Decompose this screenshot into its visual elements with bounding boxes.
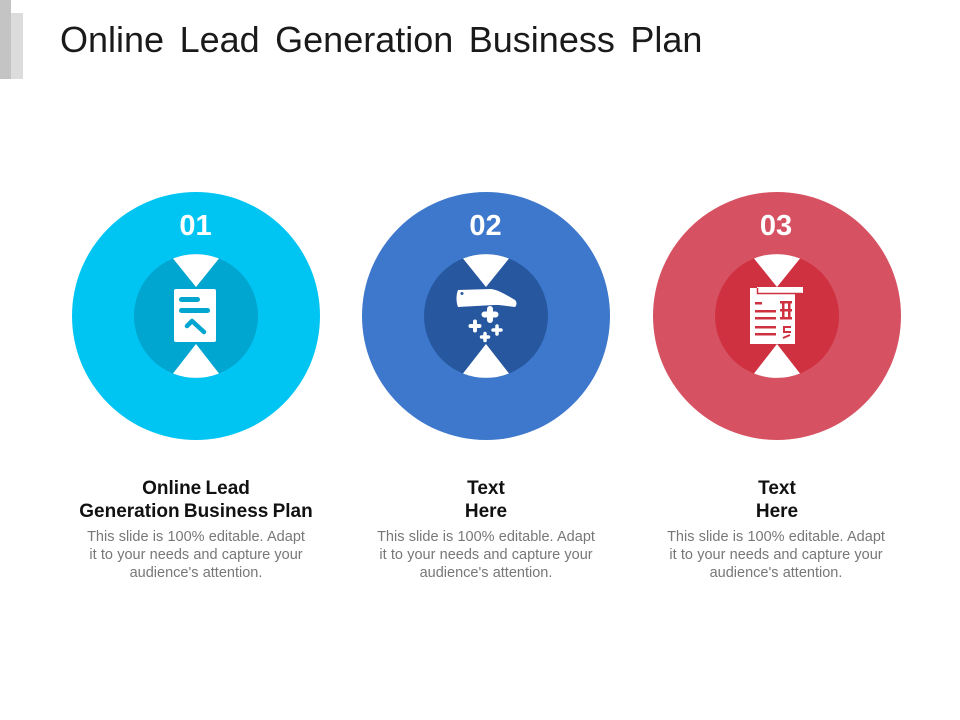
- column 2 heading: [465, 478, 507, 522]
- column 1 heading: [79, 478, 313, 522]
- column 3 text: [667, 528, 885, 580]
- column 2 text: [377, 528, 595, 580]
- column 1 heading: Online Lead: [142, 478, 250, 499]
- column 1 text: it to your needs and capture your: [89, 546, 303, 562]
- icon: newspaper: [750, 287, 803, 344]
- circle 03: [653, 192, 901, 440]
- column 1 text: audience's attention.: [130, 564, 262, 580]
- icon: document with chevron: [174, 289, 216, 342]
- column 3 text: audience's attention.: [710, 564, 842, 580]
- icon: hand over plus signs: [456, 289, 516, 340]
- circle 01: [72, 192, 320, 440]
- circle 02: 02: [469, 210, 502, 242]
- column 2 text: This slide is 100% editable. Adapt: [377, 528, 595, 544]
- column 1 text: [87, 528, 305, 580]
- column 1 heading: Generation Business Plan: [79, 501, 313, 522]
- column 1 text: This slide is 100% editable. Adapt: [87, 528, 305, 544]
- column 3 heading: [756, 478, 798, 522]
- circle 02: [362, 192, 610, 440]
- column 2 text: it to your needs and capture your: [379, 546, 593, 562]
- column 3 text: it to your needs and capture your: [669, 546, 883, 562]
- column 3 text: This slide is 100% editable. Adapt: [667, 528, 885, 544]
- column 3 heading: Here: [756, 501, 798, 522]
- circle 03: 03: [760, 210, 792, 242]
- header accent bars: [0, 0, 23, 79]
- column 2 text: audience's attention.: [420, 564, 552, 580]
- title: Online Lead Generation Business Plan: [60, 19, 702, 60]
- column 3 heading: Text: [758, 478, 796, 499]
- column 2 heading: Here: [465, 501, 507, 522]
- circle 01: 01: [179, 210, 212, 242]
- column 2 heading: Text: [467, 478, 505, 499]
